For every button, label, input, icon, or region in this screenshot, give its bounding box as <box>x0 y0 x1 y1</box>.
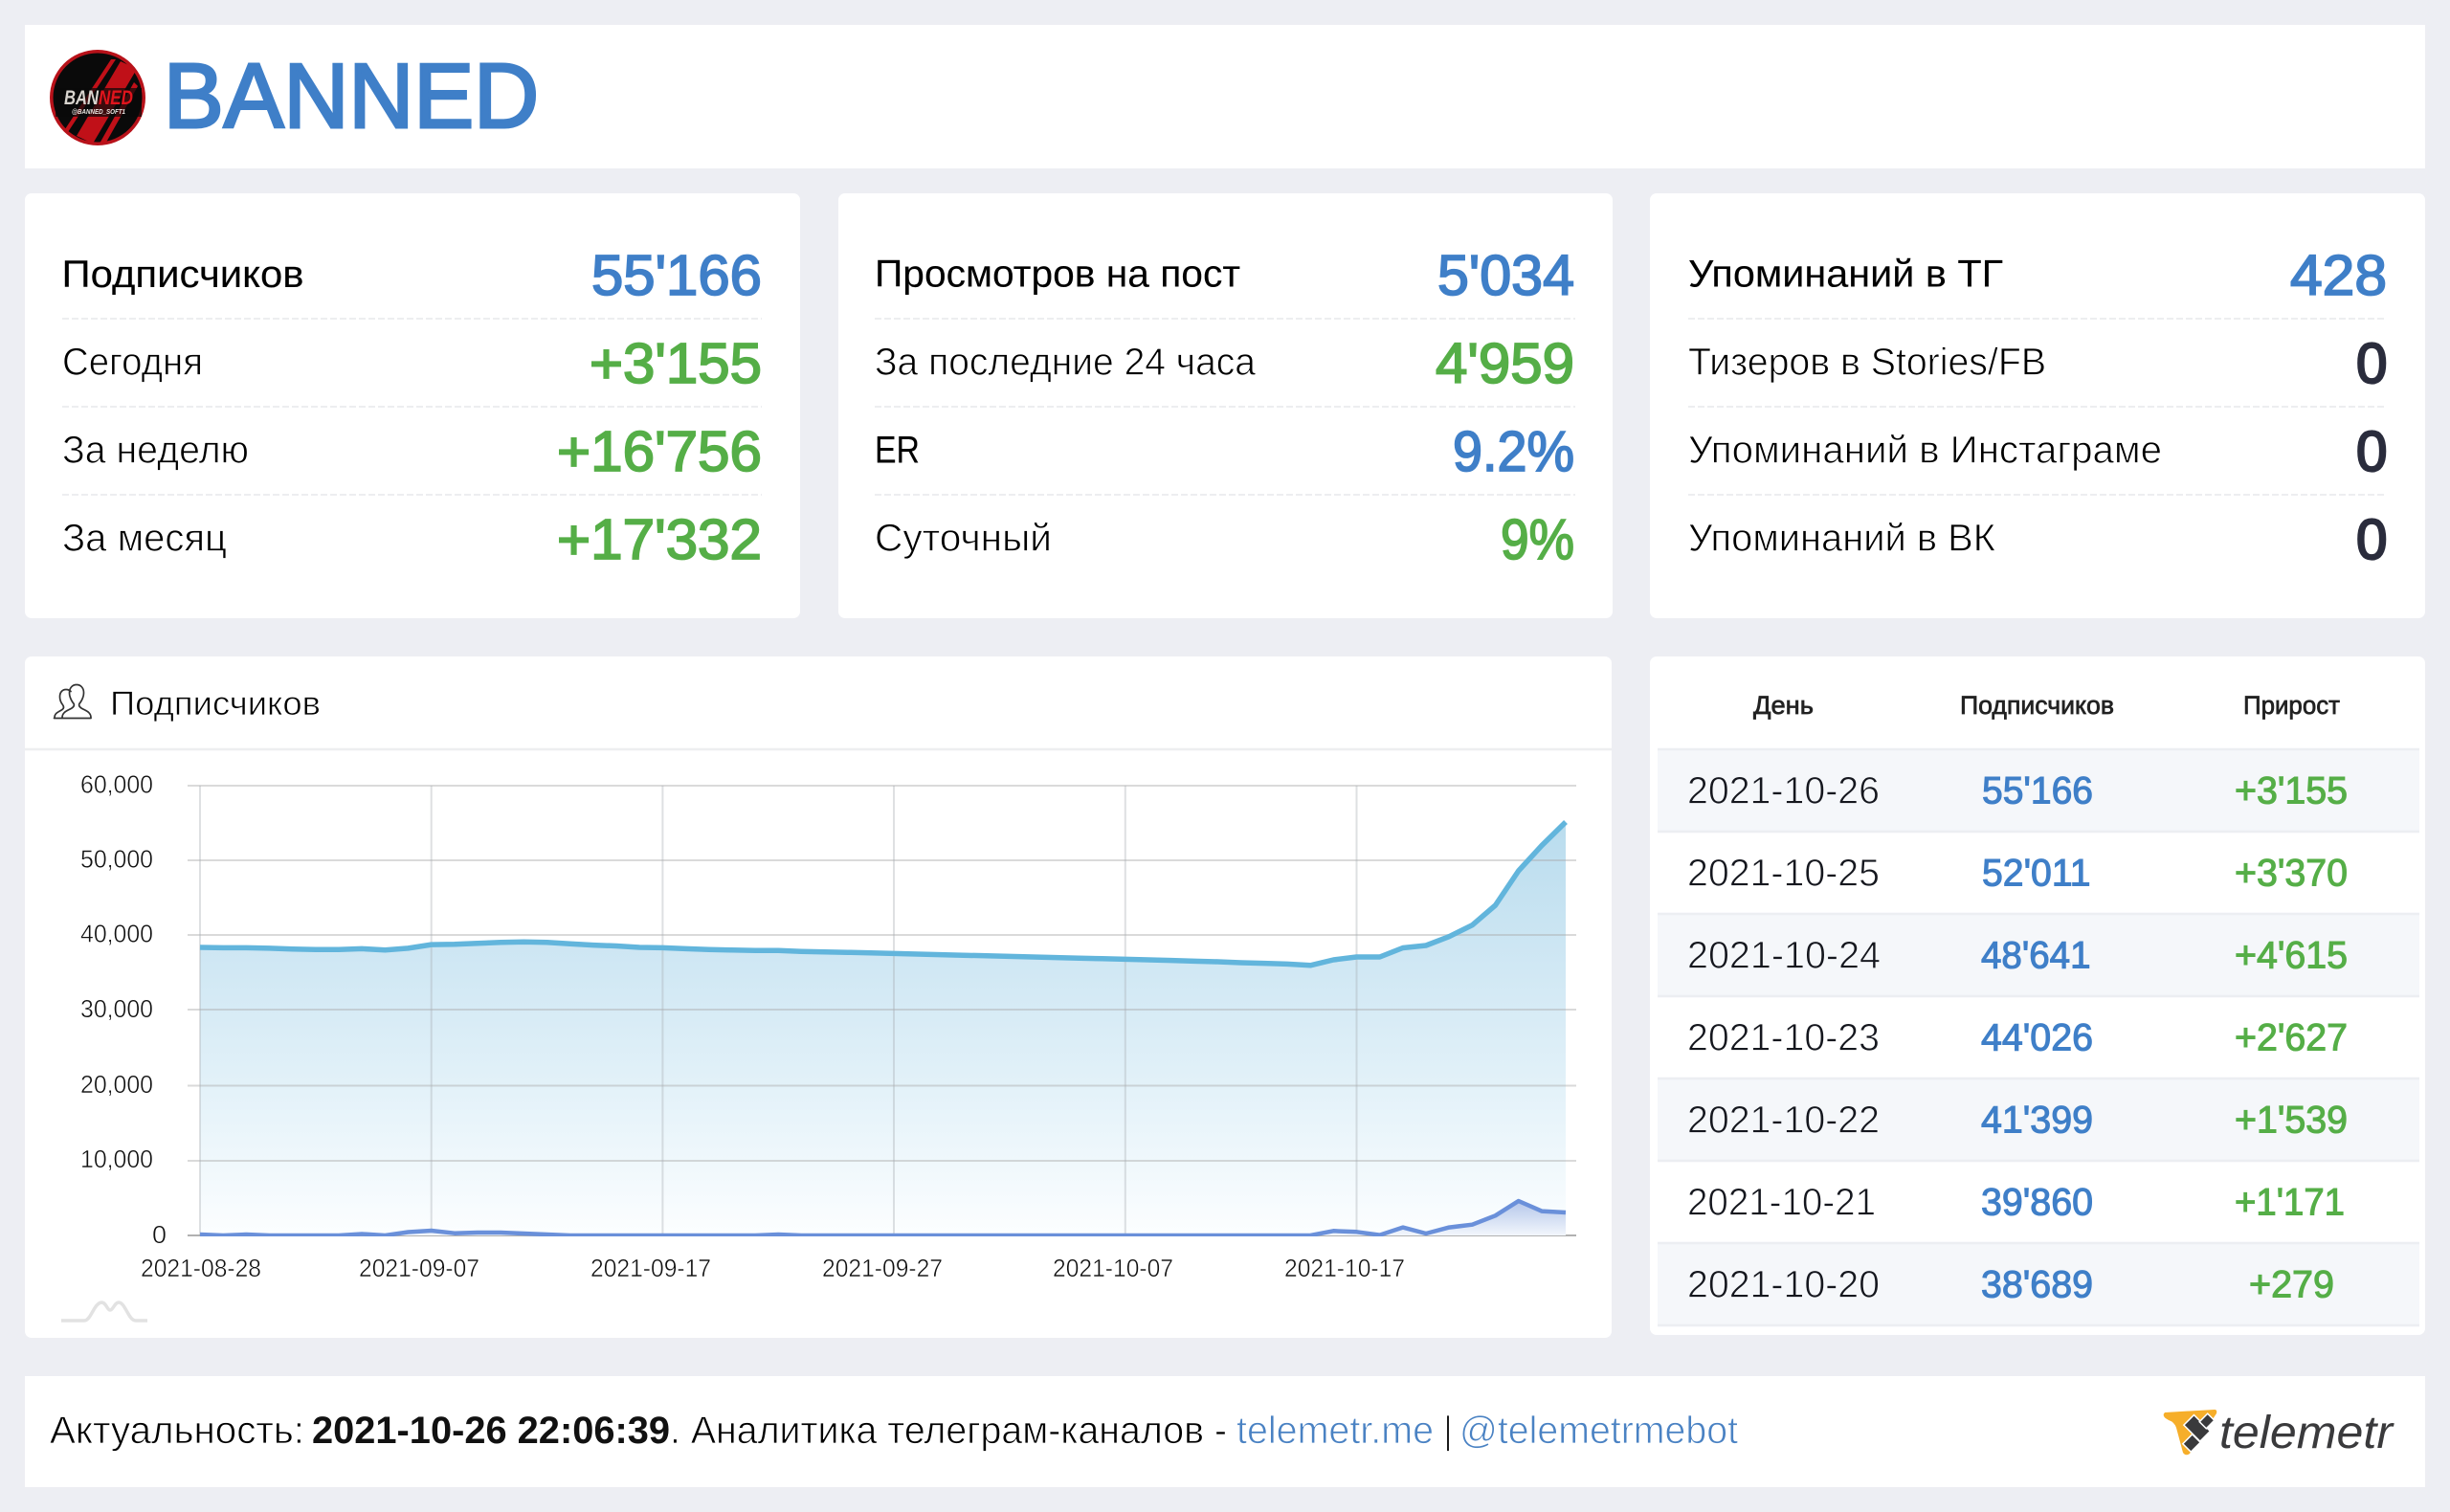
panel: daily table <box>1650 656 2425 1335</box>
y axis labels: 10,000 <box>80 1145 153 1173</box>
row: 2021-10-25: 52'011 <box>1982 852 2090 894</box>
row: ER: ER <box>875 429 920 471</box>
y axis labels: 0 <box>152 1220 167 1249</box>
x axis labels: 2021-10-17 <box>1284 1254 1405 1282</box>
title: BANNED <box>164 45 539 147</box>
row: 2021-10-24 <box>1687 934 2348 976</box>
row: vk mentions <box>1688 508 2387 571</box>
row: vk mentions: 0 <box>2356 508 2387 571</box>
row: views per post <box>875 244 1574 307</box>
row: 2021-10-23: 2021-10-23 <box>1687 1016 1880 1058</box>
panel: subscribers stats <box>25 193 800 618</box>
views line <box>200 1201 1566 1235</box>
icon: telemetr logo: telemetr <box>2219 1408 2394 1458</box>
row: subscribers: Подписчиков <box>61 254 304 296</box>
row: 2021-10-21: +1'171 <box>2235 1181 2345 1223</box>
y axis labels: 60,000 <box>80 769 153 798</box>
row: 2021-10-25 <box>1687 852 2348 894</box>
footer text <box>50 1410 1738 1452</box>
table header: День <box>1753 691 1814 720</box>
row: 2021-10-21: 39'860 <box>1981 1181 2093 1223</box>
row: 2021-10-24: +4'615 <box>2235 934 2348 976</box>
row: stories teasers <box>1688 332 2387 395</box>
x axis labels: 2021-09-17 <box>590 1254 711 1282</box>
footer text: | <box>1444 1410 1452 1452</box>
row: instagram mentions: 0 <box>2356 420 2387 483</box>
footer text: @telemetrmebot <box>1459 1410 1738 1452</box>
row: ER <box>875 420 1574 483</box>
row: week <box>62 420 762 483</box>
row: 2021-10-26: 2021-10-26 <box>1687 769 1880 812</box>
table header: Прирост <box>2243 691 2340 720</box>
panel: mentions stats <box>1650 193 2425 618</box>
panel: subscribers chart <box>25 656 1612 1338</box>
row: last 24 hours: 4'959 <box>1436 332 1574 395</box>
icon: users <box>54 685 91 718</box>
panel: views stats <box>838 193 1613 618</box>
footer panel <box>25 1376 2425 1487</box>
row: telegram mentions <box>1688 244 2387 307</box>
row: 2021-10-26: 55'166 <box>1982 769 2093 812</box>
area chart <box>188 786 1576 1235</box>
views area <box>200 1201 1566 1235</box>
y axis labels: 30,000 <box>80 994 153 1023</box>
row: daily <box>875 508 1574 571</box>
header panel <box>25 25 2425 168</box>
footer text: - <box>1214 1410 1227 1452</box>
table header <box>1753 691 2340 720</box>
y axis labels: 50,000 <box>80 844 153 873</box>
row: last 24 hours <box>875 332 1574 395</box>
y axis labels <box>80 769 167 1249</box>
row: stories teasers: Тизеров в Stories/FB <box>1688 342 2046 384</box>
row: daily: 9% <box>1501 508 1574 571</box>
row: 2021-10-22 <box>1687 1099 2348 1141</box>
y axis labels: 20,000 <box>80 1070 153 1099</box>
icon: channel logo: @BANNED_SOFT1 <box>72 107 125 116</box>
row: daily: Суточный <box>875 517 1052 559</box>
row: 2021-10-26: +3'155 <box>2235 769 2348 812</box>
row: today <box>62 332 762 395</box>
row: week: +16'756 <box>557 420 762 483</box>
x axis labels: 2021-09-27 <box>822 1254 943 1282</box>
chart heading: Подписчиков <box>110 685 321 723</box>
row: telegram mentions: Упоминаний в ТГ <box>1688 253 2003 295</box>
x axis labels: 2021-08-28 <box>141 1254 261 1282</box>
row: vk mentions: Упоминаний в ВК <box>1688 517 1996 559</box>
row: instagram mentions: Упоминаний в Инстаграме <box>1688 429 2162 471</box>
row: 2021-10-22: +1'539 <box>2235 1099 2348 1141</box>
row: 2021-10-21: 2021-10-21 <box>1687 1181 1876 1223</box>
row: 2021-10-22: 2021-10-22 <box>1687 1099 1880 1141</box>
row: month: +17'332 <box>557 508 762 571</box>
row: month: За месяц <box>62 517 227 559</box>
row: 2021-10-20: 38'689 <box>1981 1263 2093 1305</box>
row: 2021-10-22: 41'399 <box>1981 1099 2093 1141</box>
row: 2021-10-24: 48'641 <box>1981 934 2090 976</box>
row: ER: 9.2% <box>1453 420 1574 483</box>
y axis labels: 40,000 <box>80 919 153 947</box>
row: today: +3'155 <box>590 332 762 395</box>
x axis labels: 2021-10-07 <box>1053 1254 1173 1282</box>
row: views per post: Просмотров на пост <box>875 253 1240 295</box>
row: 2021-10-21 <box>1687 1181 2345 1223</box>
row: views per post: 5'034 <box>1437 244 1574 307</box>
row: 2021-10-20: 2021-10-20 <box>1687 1263 1880 1305</box>
row: 2021-10-23 <box>1687 1016 2348 1058</box>
row: telegram mentions: 428 <box>2290 244 2387 307</box>
subscribers line <box>200 822 1566 966</box>
row: 2021-10-20: +279 <box>2249 1263 2334 1305</box>
row: 2021-10-24: 2021-10-24 <box>1687 934 1881 976</box>
footer text: Актуальность: <box>50 1410 304 1452</box>
row: month <box>62 508 762 571</box>
x axis labels: 2021-09-07 <box>359 1254 479 1282</box>
row: subscribers <box>61 244 762 307</box>
icon: mini chart mark <box>61 1302 147 1321</box>
row: 2021-10-20 <box>1687 1263 2334 1305</box>
subscribers area <box>200 822 1566 1235</box>
grid <box>188 786 1576 1235</box>
row: instagram mentions <box>1688 420 2387 483</box>
row: week: За неделю <box>62 429 249 471</box>
row: 2021-10-23: +2'627 <box>2235 1016 2348 1058</box>
row: 2021-10-25: 2021-10-25 <box>1687 852 1880 894</box>
icon: channel logo: NED <box>99 87 133 109</box>
row: 2021-10-25: +3'370 <box>2235 852 2348 894</box>
row: 2021-10-23: 44'026 <box>1981 1016 2093 1058</box>
footer text: . Аналитика телеграм-каналов <box>670 1410 1204 1452</box>
table header: Подписчиков <box>1960 691 2114 720</box>
footer text: telemetr.me <box>1236 1410 1434 1452</box>
row: last 24 hours: За последние 24 часа <box>875 342 1257 384</box>
icon: channel logo <box>50 50 145 147</box>
icon: channel logo: BAN <box>64 87 100 109</box>
footer text: 2021-10-26 22:06:39 <box>312 1410 670 1452</box>
row: today: Сегодня <box>62 342 203 384</box>
x axis labels <box>141 1254 1405 1282</box>
row: 2021-10-26 <box>1687 769 2348 812</box>
row: subscribers: 55'166 <box>591 244 762 307</box>
row: stories teasers: 0 <box>2356 332 2387 395</box>
